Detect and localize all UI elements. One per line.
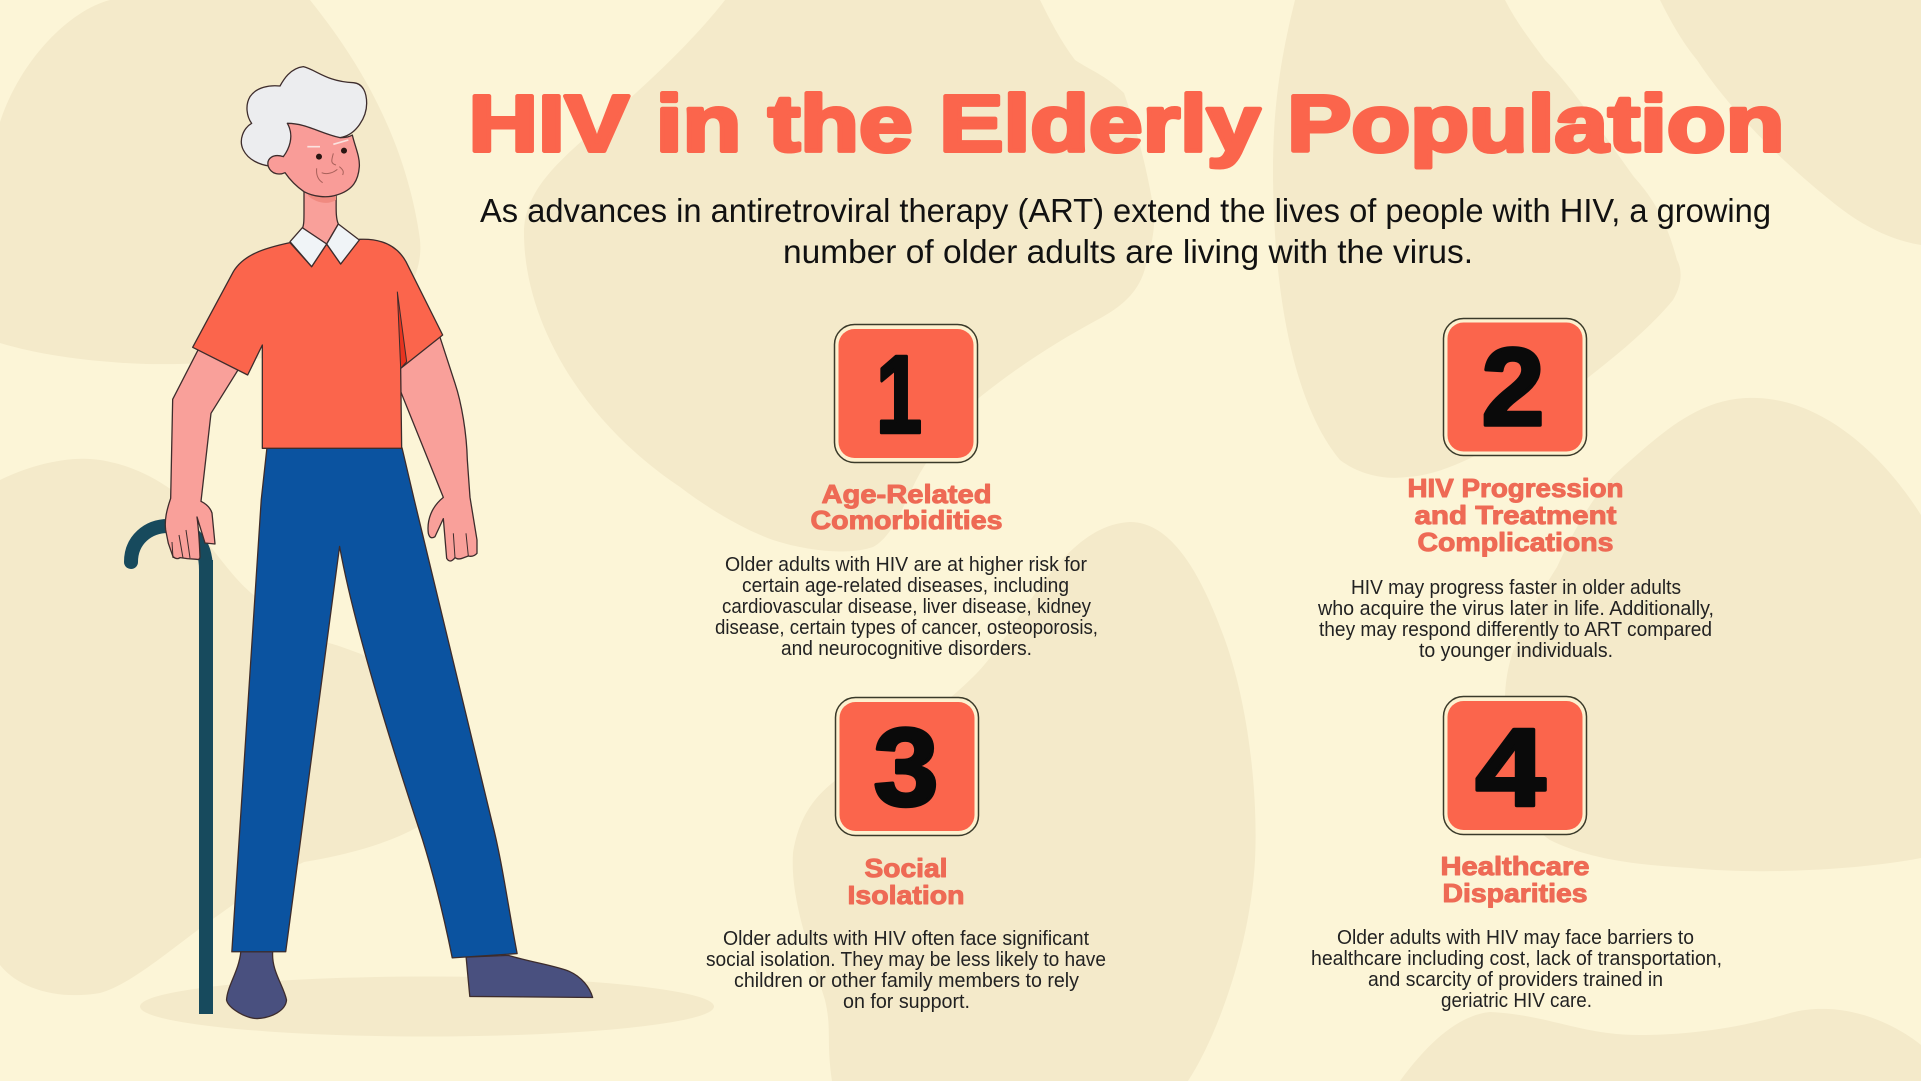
body text — [1311, 927, 1722, 1012]
body text: children or other family members to rely — [734, 970, 1079, 992]
body text: social isolation. They may be less likely to have — [706, 949, 1106, 971]
panel: healthcare disparities — [1311, 696, 1722, 1012]
neck — [302, 190, 338, 244]
heading: Isolation — [848, 880, 964, 910]
panel: age-related comorbidities — [715, 324, 1098, 660]
body text: and scarcity of providers trained in — [1368, 969, 1663, 991]
number badge 4 — [1444, 696, 1586, 834]
number badge 3 — [836, 698, 978, 836]
heading: Disparities — [1442, 878, 1588, 908]
heading — [810, 479, 1002, 535]
body text: certain age-related diseases, including — [742, 575, 1069, 597]
panel: social isolation — [706, 698, 1106, 1013]
number badge 3: 3 — [874, 706, 938, 830]
t-shirt — [193, 239, 443, 448]
number badge 4: 4 — [1476, 706, 1546, 830]
heading: Healthcare — [1440, 851, 1590, 881]
face — [268, 123, 359, 197]
body text — [706, 928, 1106, 1013]
body text: disease, certain types of cancer, osteoporosis, — [715, 617, 1098, 639]
heading — [1408, 473, 1624, 557]
body text — [1317, 577, 1714, 662]
free arm and hand — [393, 317, 477, 561]
body text: HIV may progress faster in older adults — [1351, 577, 1681, 599]
body text: Older adults with HIV often face significant — [723, 928, 1089, 950]
collar — [290, 224, 359, 267]
title: HIV in the Elderly Population — [468, 79, 1784, 168]
number badge 1: 1 — [876, 334, 922, 456]
heading: Social — [864, 853, 948, 883]
body text: they may respond differently to ART compared — [1319, 619, 1712, 641]
body text: and neurocognitive disorders. — [781, 638, 1032, 660]
body text: geriatric HIV care. — [1441, 990, 1592, 1012]
panel: HIV progression and treatment complications — [1317, 318, 1714, 662]
illustration: elderly man with cane — [131, 67, 714, 1037]
subtitle: As advances in antiretroviral therapy (ART) extend the lives of people with HIV, a growing — [480, 192, 1771, 229]
arm and hand on cane — [165, 327, 257, 559]
number badge 1 — [834, 324, 978, 462]
heading: Comorbidities — [810, 505, 1002, 535]
heading: HIV Progression — [1408, 473, 1624, 503]
body text: cardiovascular disease, liver disease, kidney — [722, 596, 1091, 618]
number badge 2: 2 — [1482, 326, 1544, 449]
body text: to younger individuals. — [1419, 640, 1613, 662]
heading: Complications — [1418, 527, 1614, 557]
number badge 2 — [1444, 318, 1586, 456]
heading: and Treatment — [1414, 500, 1617, 530]
subtitle: number of older adults are living with the virus. — [783, 233, 1473, 270]
body text — [715, 554, 1098, 660]
icon: walking cane — [131, 526, 213, 1014]
upper body — [165, 67, 477, 561]
trousers — [232, 448, 517, 958]
subtitle — [480, 192, 1771, 270]
body text: Older adults with HIV are at higher risk for — [725, 554, 1087, 576]
hair — [241, 67, 367, 166]
body text: Older adults with HIV may face barriers to — [1337, 927, 1694, 949]
heading — [1440, 851, 1590, 908]
body text: healthcare including cost, lack of transportation, — [1311, 948, 1722, 970]
body text: on for support. — [843, 991, 970, 1013]
heading — [848, 853, 964, 910]
shoes — [227, 952, 593, 1019]
ground shadow — [140, 976, 714, 1036]
body text: who acquire the virus later in life. Additionally, — [1317, 598, 1714, 620]
heading: Age-Related — [822, 479, 992, 509]
